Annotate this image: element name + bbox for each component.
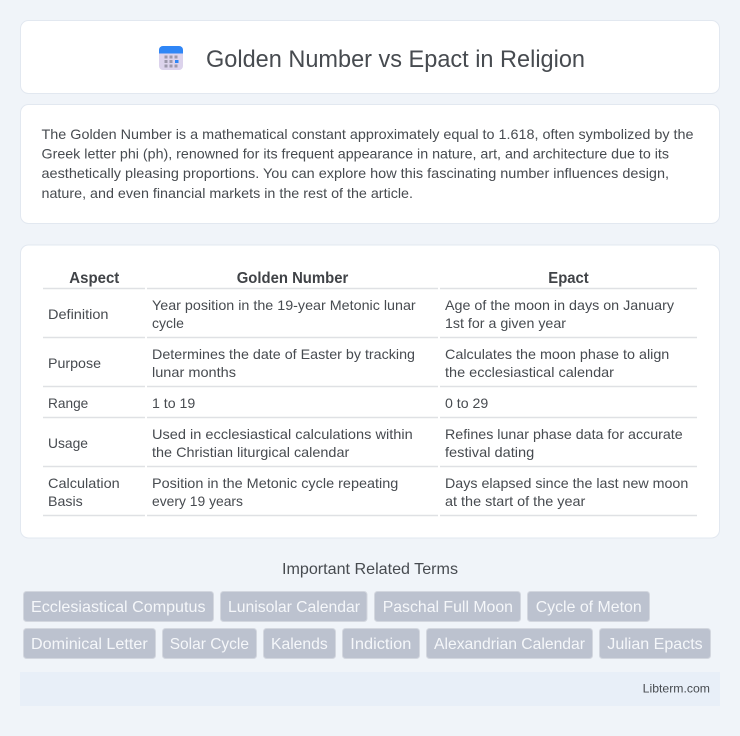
table row: purpose <box>43 346 697 386</box>
table row: usage: festival dating <box>445 444 534 460</box>
chip: Ecclesiastical Computus <box>24 592 214 622</box>
table row: purpose: Determines the date of Easter by tracking <box>152 346 415 362</box>
chip: Dominical Letter <box>24 628 156 658</box>
table row: definition: Definition <box>48 306 108 322</box>
chip: Lunisolar Calendar: Lunisolar Calendar <box>228 599 361 616</box>
table header <box>43 270 697 288</box>
table row: calculation basis: Calculation <box>48 475 120 491</box>
chip: Ecclesiastical Computus: Ecclesiastical Computus <box>31 599 206 616</box>
chip: Cycle of Meton <box>528 592 650 622</box>
table row: purpose: Calculates the moon phase to align <box>445 346 669 362</box>
panel: header <box>20 20 720 94</box>
chip: Paschal Full Moon: Paschal Full Moon <box>383 599 513 616</box>
icon: calendar <box>159 46 183 70</box>
chip: Indiction: Indiction <box>350 636 411 653</box>
chip: Solar Cycle: Solar Cycle <box>170 636 249 653</box>
heading: related terms: Important Related Terms <box>282 561 458 578</box>
table header: Golden Number <box>237 270 348 287</box>
chip: Alexandrian Calendar <box>426 628 592 658</box>
footer: Libterm.com <box>643 682 710 696</box>
panel: comparison table <box>20 245 720 538</box>
table header: Aspect <box>69 270 120 287</box>
table row: calculation basis: Position in the Metonic cycle repeating <box>152 475 398 491</box>
table row: purpose: the ecclesiastical calendar <box>445 364 614 380</box>
table row: usage: the Christian liturgical calendar <box>152 444 350 460</box>
table row: range: 0 to 29 <box>445 395 489 411</box>
text block: intro paragraph: aesthetically pleasing proportions. You can explore how this fascinating number influences design, <box>42 165 669 181</box>
table row: usage: Usage <box>48 435 88 451</box>
chip: Dominical Letter: Dominical Letter <box>31 636 148 653</box>
table row: purpose: lunar months <box>152 364 236 380</box>
chip: Kalends: Kalends <box>271 636 328 653</box>
table row: usage <box>43 426 697 466</box>
chip: Kalends <box>264 628 336 658</box>
text block: intro paragraph: The Golden Number is a mathematical constant approximately equal to 1.618, often symbolized by the <box>42 126 694 142</box>
table row: purpose: Purpose <box>48 355 101 371</box>
chip: Alexandrian Calendar: Alexandrian Calendar <box>434 636 586 653</box>
chip: Paschal Full Moon <box>374 592 520 622</box>
table row: calculation basis <box>43 475 697 516</box>
chip: Lunisolar Calendar <box>220 592 367 622</box>
table row: calculation basis: every 19 years <box>152 493 243 509</box>
table row: definition: cycle <box>152 315 184 331</box>
table row: usage: Used in ecclesiastical calculations within <box>152 426 413 442</box>
table row: range: Range <box>48 395 88 411</box>
table row: range <box>43 395 697 418</box>
chip: Indiction <box>342 628 420 658</box>
table row: definition <box>43 297 697 338</box>
chip: Cycle of Meton: Cycle of Meton <box>536 599 642 616</box>
chip: Julian Epacts <box>600 628 710 658</box>
footer <box>20 672 720 706</box>
chip: Solar Cycle <box>162 628 256 658</box>
chip: Julian Epacts: Julian Epacts <box>607 636 703 653</box>
table row: calculation basis: Basis <box>48 493 83 509</box>
text block: intro paragraph: Greek letter phi (ph), renowned for its frequent appearance in nature, art, and architecture due to its <box>42 146 669 162</box>
table row: range: 1 to 19 <box>152 395 196 411</box>
text block: intro paragraph: nature, and even financial markets in the rest of the article. <box>42 185 413 201</box>
table row: definition: 1st for a given year <box>445 315 566 331</box>
panel: introduction <box>20 104 720 224</box>
table row: definition: Year position in the 19-year Metonic lunar <box>152 297 416 313</box>
table row: usage: Refines lunar phase data for accurate <box>445 426 683 442</box>
table row: calculation basis: at the start of the year <box>445 493 586 509</box>
table header: Epact <box>548 270 589 287</box>
title: Golden Number vs Epact in Religion <box>206 46 585 73</box>
table row: definition: Age of the moon in days on January <box>445 297 674 313</box>
table row: calculation basis: Days elapsed since the last new moon <box>445 475 688 491</box>
panel: related term chips <box>24 592 710 658</box>
text block: intro paragraph <box>42 126 694 201</box>
